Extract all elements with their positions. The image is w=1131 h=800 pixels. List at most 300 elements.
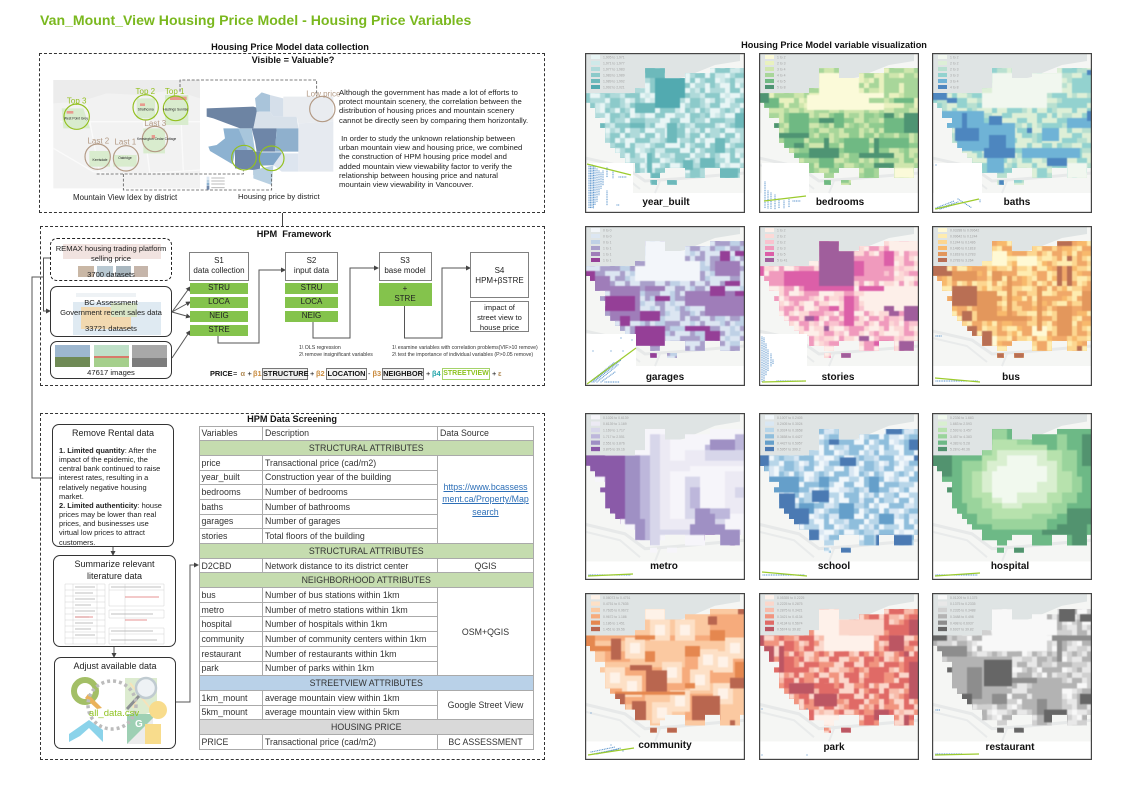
legend: bedrooms: 4 to 4: [777, 74, 786, 78]
legend: restaurant: 0.3488 to 0.498: [950, 615, 974, 619]
legend: bedrooms: [765, 55, 786, 90]
legend: stories: 5 to 41: [777, 258, 787, 262]
step S3: [378, 252, 432, 281]
table: variables: Number of restaurants within 1km: [265, 649, 397, 659]
table: variables: stories: [202, 531, 227, 541]
S3 STRE: [378, 283, 432, 306]
labels: district names: [64, 107, 188, 162]
table: variables: Google Street View: [448, 700, 523, 710]
legend: park: 0.3421 to 0.4134: [777, 615, 803, 619]
labels: district circles: [67, 87, 341, 146]
text: intro paragraph two: the construction of HPM housing price model and: [339, 152, 507, 161]
table: variables: Number of community centers within 1km: [265, 634, 426, 644]
legend: garages: 1 to 1: [603, 252, 612, 256]
table: variables: Number of parks within 1km: [265, 663, 374, 673]
image: literature table: [64, 584, 164, 644]
legend: community: 0.7635 to 0.9672: [603, 608, 629, 613]
heading: visualization: Housing Price Model variable visualization: [741, 40, 927, 50]
heading: visible valuable: Visible = Valuable?: [252, 55, 334, 65]
legend: community: 0.9672 to 1.186: [603, 615, 627, 619]
step S2: S2: [307, 256, 316, 265]
table: variables: hospital: [202, 619, 232, 629]
formula: price: -: [368, 369, 370, 378]
table: variables: D2CBD: [202, 561, 231, 571]
legend: school: 0.1007 to 0.2405: [777, 416, 803, 420]
labels: district names: West Point Grey: [64, 117, 88, 121]
step S2: input data: [294, 266, 329, 275]
table: variables: Number of hospitals within 1km: [265, 619, 387, 629]
legend: metro: 1.717 to 2.551: [603, 435, 625, 439]
legend: metro: 1.169 to 1.717: [603, 428, 625, 433]
label: baths: baths: [1004, 197, 1031, 208]
scatter: bedrooms: [762, 163, 809, 211]
text: rental reasons: virtual low prices to attract: [59, 528, 145, 537]
legend: community: 1.451 to 39.56: [603, 628, 625, 632]
text: REMAX count: 3700 datasets: [87, 270, 135, 279]
text: intro paragraph two: In order to study the unknown relationship between: [341, 134, 515, 143]
heading: data screening: HPM Data Screening: [247, 414, 337, 424]
table: variables: Number of metro stations within 1km: [265, 605, 408, 615]
labels: district circles: Top 3: [67, 97, 87, 106]
scatter: park: [762, 709, 808, 755]
map panel: stories: [759, 226, 919, 386]
text: rental reasons: impact of the epidemic, the: [59, 455, 148, 464]
S1 NEIG: [190, 311, 248, 322]
choropleth: baths: [933, 68, 1091, 185]
map panel: baths: [932, 53, 1092, 213]
legend: park: 0.2225 to 0.2875: [777, 602, 803, 606]
legend: garages: 0 to 0: [603, 234, 612, 238]
table: variables: average mountain view within 1km: [265, 693, 399, 703]
table: variables: Variables: [202, 428, 238, 438]
legend: park: 0.05355 to 0.2225: [777, 596, 804, 600]
note: S3 steps: [392, 345, 538, 358]
title: Van_Mount_View Housing Price Model - Housing Price Variables: [40, 12, 471, 28]
panel: data collection: [39, 53, 545, 213]
formula: price: β2: [316, 369, 325, 378]
legend: bedrooms: 2 to 3: [777, 62, 786, 66]
labels: district circles: Last 2: [87, 137, 110, 146]
legend: stories: 3 to 5: [777, 252, 786, 256]
legend: baths: 4 to 8: [950, 86, 959, 90]
map: mountain view index: [53, 80, 200, 188]
table: variables: STREETVIEW ATTRIBUTES: [310, 678, 423, 688]
text: rental reasons: prices, and businesses use: [59, 519, 149, 528]
legend: restaurant: 0.01209 to 0.1375: [950, 596, 977, 600]
formula: price: β1: [253, 369, 262, 378]
labels: district circles: Last 3: [144, 119, 167, 128]
heading: adjust: Adjust available data: [73, 661, 157, 671]
label: bedrooms: bedrooms: [816, 197, 865, 208]
table: variables: Number of bedrooms: [265, 487, 348, 497]
label: park: park: [823, 742, 845, 753]
S3 STRE: STRE: [394, 294, 416, 303]
text: BC count: 33721 datasets: [85, 324, 137, 333]
table: variables: QGIS: [474, 561, 496, 571]
legend: baths: 1 to 2: [950, 56, 959, 60]
text: intro paragraph two: relationship between housing price and natural: [339, 171, 498, 180]
legend: garages: 0 to 1: [603, 240, 612, 244]
legend: restaurant: 0.1375 to 0.2335: [950, 602, 976, 606]
photos: listings: [63, 244, 161, 277]
map panel: community: [585, 593, 745, 760]
text: BC label: [60, 298, 162, 316]
table: variables: OSM+QGIS: [462, 627, 509, 637]
note: S2 steps: 2\ remove insignificant variables: [299, 352, 373, 358]
table: variables: HOUSING PRICE: [331, 722, 401, 732]
legend: baths: 2 to 2: [950, 62, 959, 66]
label: hospital: hospital: [991, 561, 1029, 572]
map panel: bus: [932, 226, 1092, 386]
legend: hospital: 2.593 to 3.457: [950, 428, 972, 433]
legend: baths: [938, 55, 959, 90]
icon: map and magnifier: [125, 678, 157, 716]
table: variables: bus: [202, 590, 216, 600]
formula term: streetview: [442, 368, 490, 380]
legend: school: 0.3658 to 0.4427: [777, 435, 803, 439]
heading: literature: [74, 559, 155, 580]
formula: price: β4: [432, 369, 441, 378]
formula term: location: LOCATION: [327, 369, 366, 378]
legend: hospital: [938, 415, 974, 452]
map panel: garages: [585, 226, 745, 386]
panel: data screening: [40, 413, 545, 760]
table: variables: community: [202, 634, 244, 644]
text: image count: 47617 images: [87, 368, 135, 377]
formula: price: PRICE: [210, 369, 233, 378]
scatter: baths: [934, 163, 982, 211]
table: variables: metro: [202, 605, 224, 615]
map panel: restaurant: [932, 593, 1092, 760]
labels: district circles: Top 1: [165, 87, 185, 96]
text: intro paragraph two: [339, 134, 522, 189]
text: REMAX label: [56, 244, 166, 262]
scatter: hospital: [935, 573, 980, 576]
table: variables: year_built: [202, 472, 240, 482]
note: S3 steps: 1\ examine variables with correlation problems(VIF>10 remove): [392, 345, 538, 351]
heading: literature: Summarize relevant: [74, 559, 155, 569]
photos: street view segmentation: [55, 345, 167, 367]
legend: community: 0.08073 to 0.4751: [603, 596, 630, 600]
labels: district names: Kerrisdale: [93, 158, 108, 162]
map panel: hospital: [932, 413, 1092, 580]
legend: hospital: 3.457 to 4.383: [950, 435, 972, 439]
table: variables: PRICE: [202, 737, 228, 747]
labels: district names: Strathcona: [138, 107, 154, 111]
icon: house: [69, 720, 103, 742]
S2 LOCA: [285, 297, 338, 308]
text: rental reasons: interest rates, resulting in a: [59, 473, 148, 482]
legend: bus: 0.1818 to 0.2783: [950, 252, 976, 256]
table: variables: search: [472, 507, 499, 517]
legend: bus: [938, 228, 979, 262]
legend: metro: [591, 415, 629, 452]
legend: metro: 0.1026 to 0.6139: [603, 416, 629, 420]
map panel: park: [759, 593, 919, 760]
caption: mountain view: Mountain View Idex by district: [73, 193, 177, 202]
text: rental reasons: 2. Limited authenticity: house: [59, 501, 162, 510]
labels: district names: Oakridge: [118, 156, 132, 160]
ring: dashed link: [88, 681, 136, 729]
step S1: [189, 252, 249, 281]
legend: bus: 0.2783 to 3.264: [950, 258, 974, 262]
formula: price: [210, 368, 502, 380]
table: variables: bedrooms: [202, 487, 241, 497]
scatter: bus: [935, 336, 980, 382]
legend: bus: 0.09642 to 0.1244: [950, 234, 977, 238]
choropleth: hospital: [933, 428, 1091, 553]
legend: bus: 0.03288 to 0.09642: [950, 228, 979, 232]
label: garages: garages: [646, 372, 685, 383]
text: BC label: BC Assessment: [84, 298, 138, 307]
box: remove rental data: [52, 424, 174, 547]
legend: baths: 3 to 3: [950, 74, 959, 78]
legend: bedrooms: 3 to 4: [777, 68, 786, 72]
legend: stories: 2 to 2: [777, 234, 786, 238]
S2 STRU: STRU: [301, 283, 322, 292]
legend: garages: [591, 228, 612, 262]
text: rental reasons: market.: [59, 492, 84, 501]
choropleth: garages: [586, 241, 744, 358]
table: variables: Number of bathrooms: [265, 502, 350, 512]
S4 impact: impact of: [484, 303, 515, 312]
scatter: community: [588, 713, 634, 755]
S4 impact: house price: [480, 323, 519, 332]
step S1: S1: [214, 256, 224, 265]
S1 LOCA: [190, 297, 248, 308]
legend: school: 0.3024 to 0.3658: [777, 428, 803, 433]
text: rental reasons: 1. Limited quantity: After the: [59, 446, 157, 455]
text: intro paragraph two: added mountain view viewability factor to verify the: [339, 162, 512, 171]
legend: garages: 0 to 0: [603, 228, 612, 232]
S3 STRE: +: [403, 284, 407, 293]
text: intro paragraph one: distribution of housing prices and mountain scenery: [339, 106, 514, 115]
text: intro paragraph two: urban mountain view and housing price, we combined: [339, 143, 522, 152]
legend: hospital: 1.683 to 2.593: [950, 422, 972, 426]
legend: park: 0.4134 to 0.5674: [777, 621, 803, 625]
table: variables: https://www.bcassess: [443, 482, 528, 492]
S2 STRU: [285, 283, 338, 294]
formula term: location: [326, 368, 367, 380]
box: adjust data: [54, 657, 176, 749]
chart: district maps: [53, 80, 340, 190]
label: stories: stories: [822, 372, 855, 383]
scatter: school: [762, 572, 807, 576]
choropleth: bedrooms: [760, 68, 918, 185]
table: variables: ment.ca/Property/Map: [442, 494, 529, 504]
text: intro paragraph one: Although the government has made a lot of efforts to: [339, 88, 518, 97]
legend: year_built: 1,905 to 1,971: [603, 56, 625, 60]
choropleth: bus: [933, 241, 1091, 358]
table: variables: Network distance to its district center: [265, 561, 408, 571]
scatter: metro: [588, 574, 633, 576]
heading: literature: literature data: [87, 570, 142, 580]
choropleth: stories: [760, 241, 918, 358]
step S4: HPM+βSTRE: [475, 276, 524, 285]
legend: school: 0.2405 to 0.3024: [777, 422, 803, 426]
legend: bedrooms: 5 to 8: [777, 86, 786, 90]
legend: park: 0.2875 to 0.3421: [777, 608, 803, 613]
legend: community: [591, 595, 630, 632]
choropleth: community: [586, 609, 744, 733]
legend: restaurant: 0.2335 to 0.3488: [950, 608, 976, 613]
S2 LOCA: LOCA: [301, 297, 322, 306]
table: variables: Transactional price (cad/m2): [265, 737, 376, 747]
icon: QGIS: [74, 680, 102, 709]
legend: hospital: 4.383 to 5.28: [950, 441, 970, 445]
choropleth: school: [760, 428, 918, 553]
text: rental reasons: customers.: [59, 538, 95, 547]
label: school: school: [818, 561, 850, 572]
table: variables: Total floors of the building: [265, 531, 365, 541]
text: REMAX label: REMAX housing trading platform: [56, 244, 166, 253]
legend: bedrooms: 4 to 5: [777, 80, 786, 84]
scatter: restaurant: [935, 710, 979, 755]
legend: metro: 2.551 to 3.876: [603, 441, 625, 445]
table: variables: park: [202, 663, 219, 673]
label: year_built: year_built: [642, 197, 690, 208]
table: variables: Number of bus stations within 1km: [265, 590, 399, 600]
legend: stories: 2 to 3: [777, 246, 786, 250]
legend: garages: 1 to 1: [603, 258, 612, 262]
formula: price: +: [248, 369, 252, 378]
formula: price: +: [492, 369, 496, 378]
text: intro paragraph two: mountain view viewability in Vancouver.: [339, 180, 473, 189]
legend: stories: 2 to 2: [777, 240, 786, 244]
table: variables: average mountain view within 5km: [265, 707, 399, 717]
legend: community: 0.4751 to 0.7635: [603, 602, 629, 606]
formula term: neighbor: NEIGHBOR: [383, 369, 423, 378]
text: rental reasons: [59, 446, 162, 547]
legend: baths: 2 to 3: [950, 68, 959, 72]
legend: year_built: 1,992 to 2,021: [603, 86, 625, 90]
legend: community: 1.186 to 1.451: [603, 621, 625, 625]
table: variables: Data Source: [440, 428, 489, 438]
S2 NEIG: [285, 311, 338, 322]
legend: bedrooms: 1 to 2: [777, 56, 786, 60]
text: intro paragraph one: protect mountain scenery, the correlation between the: [339, 97, 522, 106]
image: sales map: [73, 293, 161, 335]
legend: year_built: 1,971 to 1,977: [603, 62, 625, 66]
legend: garages: 1 to 1: [603, 246, 612, 250]
table: variables: garages: [202, 516, 233, 526]
table: variables: BC ASSESSMENT: [448, 737, 523, 747]
scatter: year_built: [586, 163, 633, 211]
legend: stories: 1 to 2: [777, 228, 786, 232]
panel: HPM framework: [40, 226, 545, 386]
step S3: base model: [384, 266, 426, 275]
choropleth: year_built: [586, 68, 744, 185]
step S2: [285, 252, 338, 281]
scatter: garages: [586, 334, 636, 384]
text: intro paragraph one: [339, 88, 528, 125]
S1 STRE: [190, 325, 248, 336]
labels: district names: Kensington Cedar Cottage: [137, 137, 176, 141]
text: REMAX label: selling price: [91, 254, 131, 262]
note: S2 steps: [299, 345, 373, 358]
heading: data collection: Housing Price Model data collection: [211, 42, 369, 52]
label: bus: bus: [1002, 372, 1020, 383]
legend: park: 0.5674 to 39.82: [777, 628, 801, 632]
circles: last districts: [85, 96, 335, 171]
legend: restaurant: 0.6937 to 39.82: [950, 628, 974, 632]
step S4: S4: [495, 266, 504, 275]
choropleth: restaurant: [933, 609, 1091, 733]
map panel: school: [759, 413, 919, 580]
S4 impact: street view to: [477, 313, 522, 322]
note: S3 steps: 2\ test the importance of individual variables (P>0.05 remove): [392, 352, 533, 358]
source: street view images: [50, 341, 172, 379]
connectors: [97, 80, 317, 190]
S2 NEIG: NEIG: [302, 311, 321, 320]
label: metro: metro: [650, 561, 678, 572]
table: variables: Transactional price (cad/m2): [265, 458, 376, 468]
table: variables: STRUCTURAL ATTRIBUTES: [309, 546, 424, 556]
legend: restaurant: [938, 595, 977, 632]
legend: year_built: [591, 55, 625, 90]
legend: restaurant: 0.498 to 0.6937: [950, 621, 974, 625]
formula: price: β3: [372, 369, 381, 378]
formula term: structure: STRUCTURE: [263, 369, 309, 378]
labels: district names: Hastings Sunrise: [163, 107, 188, 111]
scatter: stories: [760, 334, 807, 384]
legend: year_built: 1,983 to 1,989: [603, 74, 625, 78]
step S4: [470, 252, 529, 298]
table: variables: Number of garages: [265, 516, 340, 526]
map panel: metro: [585, 413, 745, 580]
legend: bus: 0.1244 to 0.1486: [950, 240, 976, 244]
S1 NEIG: NEIG: [209, 311, 229, 320]
caption: housing price: Housing price by district: [238, 192, 320, 201]
legend: baths: 3 to 4: [950, 80, 959, 84]
labels: district circles: Top 2: [136, 87, 156, 96]
heading: remove rental: Remove Rental data: [72, 428, 154, 438]
label: restaurant: restaurant: [986, 742, 1035, 753]
legend: bus: 0.1486 to 0.1818: [950, 246, 976, 250]
icons: data sources: [69, 676, 167, 744]
step S1: data collection: [193, 266, 245, 275]
S1 STRU: [190, 283, 248, 294]
arrow: section one to framework: [282, 213, 283, 226]
map panel: year_built: [585, 53, 745, 213]
box: literature: [53, 555, 176, 647]
table: variables: price: [202, 458, 221, 468]
S4 impact: [470, 301, 529, 332]
text: intro paragraph one: cannot be directly seen by comparing them horizontally.: [339, 116, 528, 125]
map: housing price by district: [207, 92, 333, 185]
legend: metro: 0.6139 to 1.169: [603, 422, 627, 426]
legend: school: 0.5957 to 399.2: [777, 448, 801, 452]
table: variables: restaurant: [202, 649, 241, 659]
source: BC Assessment: [50, 286, 172, 337]
arrows: framework connectors: [32, 258, 470, 702]
step S3: S3: [400, 256, 410, 265]
circles: top districts: [64, 95, 284, 171]
source: REMAX: [50, 238, 172, 281]
labels: district circles: Low price: [306, 89, 340, 98]
heading: HPM framework: HPM Framework: [257, 229, 331, 239]
table: variables: Construction year of the building: [265, 472, 391, 482]
table: variables: 5km_mount: [202, 707, 247, 717]
note: S2 steps: 1\ OLS regression: [299, 345, 341, 351]
formula: price: +: [426, 369, 430, 378]
legend: year_built: 1,989 to 1,992: [603, 80, 625, 84]
formula: price: =: [233, 369, 237, 378]
legend: year_built: 1,977 to 1,983: [603, 68, 625, 72]
legend: hospital: 0.2336 to 1.683: [950, 416, 974, 420]
formula term: streetview: STREETVIEW: [443, 370, 489, 377]
choropleth: metro: [586, 429, 744, 550]
